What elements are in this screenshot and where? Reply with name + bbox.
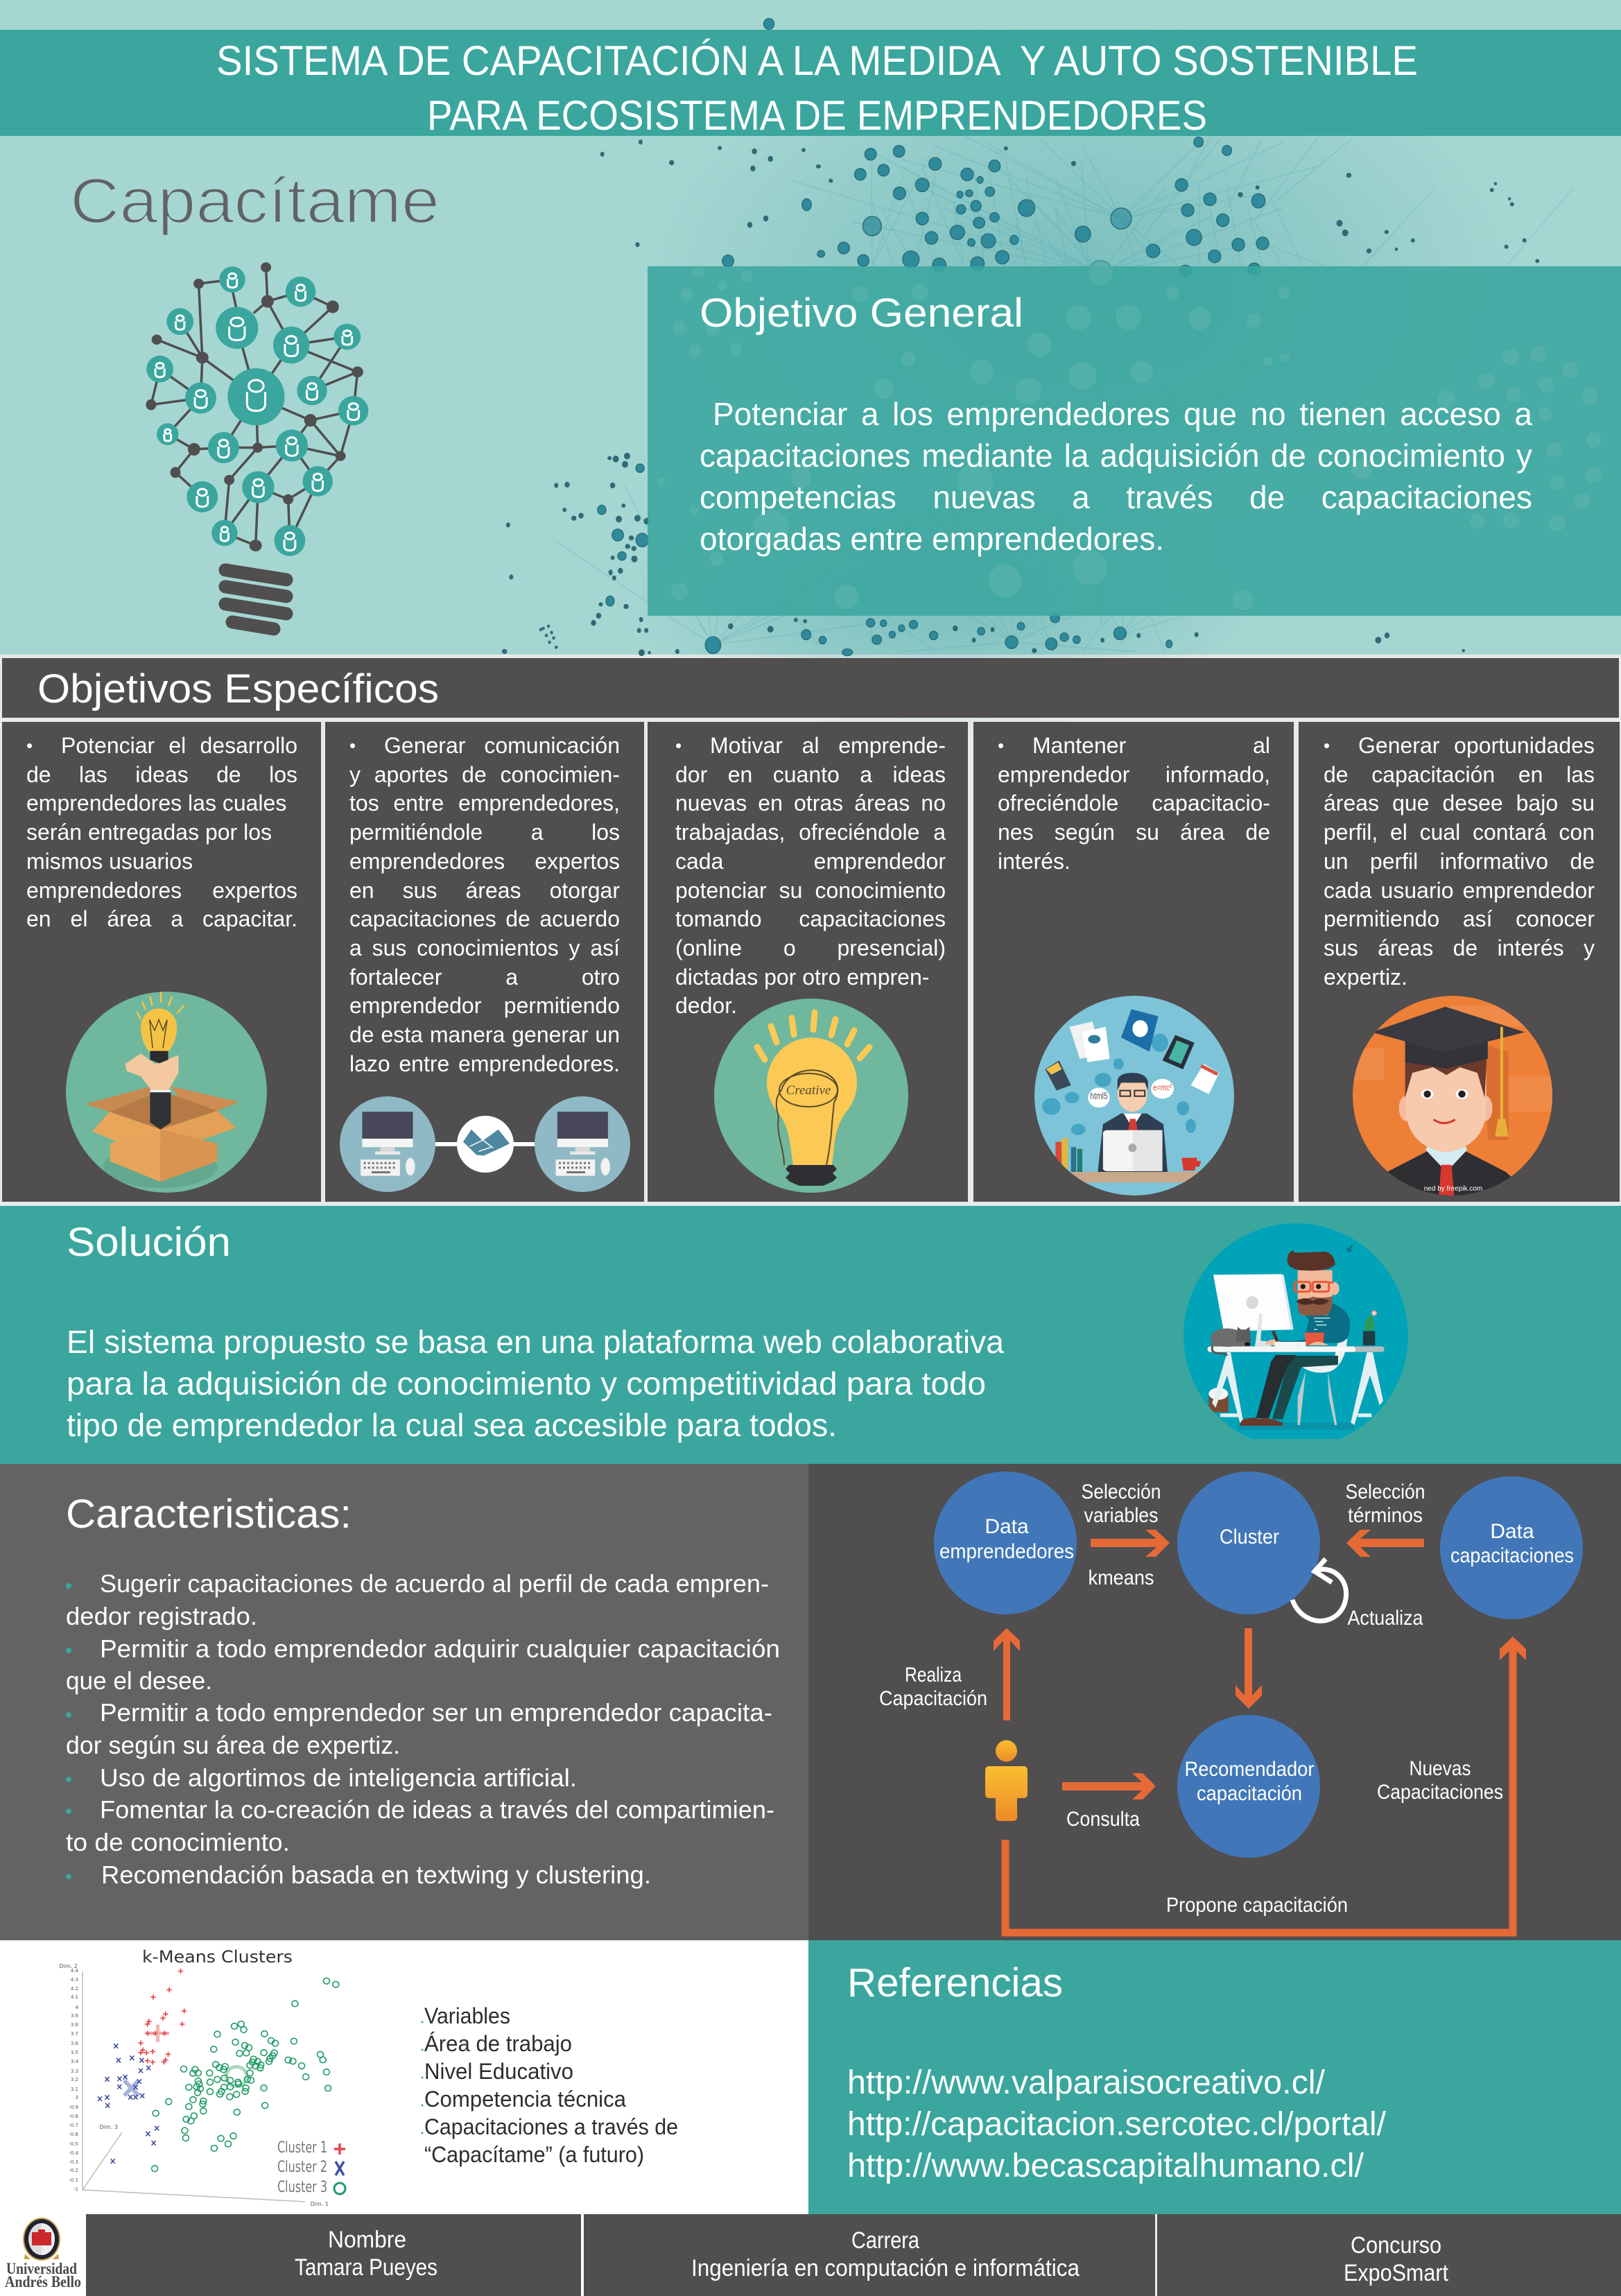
diagram labels: Capacitaciones [1377, 1781, 1503, 1804]
heading: solucion: Solución [67, 1220, 231, 1265]
diagram labels: Realiza [905, 1664, 962, 1686]
chart: k-means clusters: Dim. 1 [311, 2201, 329, 2207]
chart: k-means clusters [60, 1947, 345, 2207]
node: data capacitaciones [1440, 1476, 1583, 1619]
chart: k-means clusters: k-Means Clusters [142, 1947, 293, 1967]
column 5: permitiendo así conocer [1324, 906, 1595, 931]
chart: k-means clusters: -0.1 [69, 2177, 78, 2183]
panel: objetivo general [648, 261, 1621, 616]
diagram labels: Actualiza [1348, 1607, 1423, 1630]
column 2: emprendedores expertos [349, 849, 620, 874]
text block: caracteristicas list: to de conocimiento. [66, 1828, 290, 1856]
column 4: nes según su área de [998, 820, 1270, 845]
node: data emprendedores [934, 1471, 1077, 1614]
arrow: realiza capacitacion [994, 1628, 1020, 1720]
icon: graduate portrait [1353, 996, 1555, 1198]
text block: objetivo general: capacitaciones mediante la adquisición de conocimiento y [700, 438, 1532, 474]
column 1: de las ideas de los [26, 762, 297, 787]
footer: concurso: ExpoSmart [1344, 2260, 1448, 2286]
column 1: serán entregadas por los [26, 820, 272, 845]
diagram labels: Nuevas [1409, 1757, 1471, 1780]
text block: variables: “Capacítame” (a futuro) [424, 2142, 644, 2167]
column 4 [973, 722, 1294, 1202]
icon: two computers and handshake [340, 1096, 630, 1192]
panel: objetivos especificos [2, 658, 1620, 1202]
chart legend: Cluster 2 [277, 2159, 327, 2176]
heading: objetivo general: Objetivo General [700, 291, 1023, 336]
text block: solucion: para la adquisición de conocimiento y competitividad para todo [67, 1365, 986, 1401]
icon: man at laptop with floating documents: html5 [1090, 1090, 1108, 1101]
chart: k-means clusters: Dim. 2 [60, 1963, 78, 1969]
panel: k-means chart and variables [0, 1940, 808, 2296]
text block: caracteristicas list: Fomentar la co-creación de ideas a través del compartimien- [100, 1795, 774, 1824]
chart: k-means clusters: -0.8 [69, 2114, 78, 2119]
title band [0, 30, 1621, 139]
column 4: Mantener al [1032, 733, 1270, 758]
text block: caracteristicas list: dor según su área de expertiz. [66, 1731, 400, 1759]
chart: k-means clusters: -0.3 [69, 2159, 78, 2165]
logo: universidad andres bello [5, 2218, 81, 2290]
chart: k-means clusters: 3.1 [71, 2087, 78, 2092]
arrow: seleccion variables [1091, 1530, 1170, 1557]
heading band: objetivos especificos [2, 658, 1619, 718]
arrow: propone capacitacion [1005, 1642, 1513, 1933]
text block: solucion: tipo de emprendedor la cual sea accesible para todos. [67, 1407, 837, 1443]
column 1: Potenciar el desarrollo [61, 733, 297, 758]
text block: variables: Competencia técnica [424, 2087, 626, 2112]
title band: SISTEMA DE CAPACITACIÓN A LA MEDIDA Y AUTO SOSTENIBLE [216, 37, 1418, 84]
chart: k-means clusters: 3.2 [71, 2077, 78, 2082]
column 2: de esta manera generar un [349, 1022, 620, 1047]
chart: k-means clusters: -1 [73, 2186, 78, 2192]
text block: caracteristicas list: Uso de algortimos de inteligencia artificial. [100, 1763, 577, 1792]
chart: k-means clusters: 3.3 [71, 2069, 78, 2074]
chart: k-means clusters: -0.4 [69, 2150, 79, 2156]
panel: system flow diagram [808, 1464, 1621, 1940]
column 2: fortalecer a otro [349, 965, 620, 990]
heading: caracteristicas: Caracteristicas: [66, 1492, 352, 1537]
diagram labels: Capacitación [879, 1687, 987, 1710]
node: recomendador [1177, 1715, 1320, 1858]
panel: top hero with network background [0, 0, 1621, 735]
arrow: consulta [1062, 1773, 1156, 1799]
column 3: dor en cuanto a ideas [675, 762, 946, 787]
logo: universidad andres bello: Andrés Bello [5, 2273, 81, 2290]
chart: k-means clusters: -0.6 [69, 2132, 79, 2137]
diagram labels: Data [985, 1515, 1029, 1538]
chart legend: Cluster 1 [277, 2139, 327, 2157]
text block: solucion: El sistema propuesto se basa en una plataforma web colaborativa [67, 1324, 1004, 1360]
text block: caracteristicas list: Permitir a todo emprendedor adquirir cualquier capacitación [100, 1634, 780, 1663]
diagram labels: Selección [1345, 1481, 1425, 1503]
column 1: emprendedores las cuales [26, 791, 286, 815]
column 3: dedor. [675, 993, 737, 1018]
column 5: sus áreas de interés y [1324, 935, 1595, 960]
icon: hand with light bulb out of box [66, 992, 267, 1193]
diagram labels: Propone capacitación [1166, 1894, 1348, 1917]
chart: k-means clusters: 3 [76, 2095, 78, 2100]
chart: k-means clusters: 4.4 [71, 1968, 79, 1974]
footer: concurso [1157, 2214, 1621, 2296]
network background illustration [502, 14, 1574, 735]
footer: nombre: Nombre [328, 2227, 406, 2253]
column 3: potenciar su conocimiento [675, 878, 946, 903]
column 4: interés. [998, 849, 1070, 874]
text block: caracteristicas list [66, 1569, 780, 1889]
diagram labels: variables [1084, 1504, 1158, 1527]
diagram labels: kmeans [1089, 1566, 1154, 1589]
footer: nombre: Tamara Pueyes [295, 2254, 437, 2281]
text block: objetivo general: competencias nuevas a través de capacitaciones [700, 479, 1532, 515]
column 4: ofreciéndole capacitacio- [998, 791, 1270, 815]
diagram labels: emprendedores [939, 1540, 1074, 1563]
logo: universidad andres bello: Universidad [6, 2260, 77, 2277]
diagram labels: capacitación [1197, 1782, 1302, 1805]
text block: variables: Nivel Educativo [424, 2059, 573, 2084]
text block: variables: Área de trabajo [424, 2031, 572, 2056]
diagram labels [879, 1481, 1574, 1917]
panel: caracteristicas [0, 1464, 808, 1940]
column 1: mismos usuarios [26, 849, 193, 874]
column 3: trabajadas, ofreciéndole a [675, 820, 946, 845]
bullets [66, 1583, 71, 1879]
footer: nombre [86, 2214, 581, 2296]
column 2: capacitaciones de acuerdo [349, 906, 620, 931]
icon: graduate portrait: ned by freepik.com [1424, 1185, 1482, 1193]
column 5: cada usuario emprendedor [1324, 878, 1595, 903]
column 5: perfil, el cual contará con [1324, 820, 1595, 845]
text block: variables [422, 2003, 678, 2167]
chart: k-means clusters: 3.4 [71, 2059, 79, 2064]
column 5: Generar oportunidades [1358, 733, 1595, 758]
column 3: cada emprendedor [675, 849, 946, 874]
icon: man at laptop with floating documents [1034, 996, 1234, 1196]
column 3 [648, 722, 968, 1202]
chart: k-means clusters: 4.3 [71, 1977, 78, 1983]
column 5: expertiz. [1324, 965, 1407, 990]
icon: person [985, 1741, 1028, 1821]
text block: reference links: http://capacitacion.sercotec.cl/portal/ [847, 2106, 1387, 2143]
brand name: Capacítame [70, 166, 440, 236]
chart: k-means clusters: 3.8 [71, 2022, 78, 2028]
text block: objetivo general: otorgadas entre emprendedores. [700, 521, 1164, 557]
column 5: un perfil informativo de [1324, 849, 1595, 874]
chart: k-means clusters: 3.7 [71, 2031, 78, 2037]
chart legend: Cluster 3 [277, 2179, 327, 2196]
column 5: de capacitación en las [1324, 762, 1595, 787]
footer: concurso: Concurso [1351, 2232, 1441, 2259]
heading: referencias: Referencias [847, 1960, 1063, 2005]
chart: k-means clusters: 3.9 [71, 2013, 78, 2019]
icon: creative light bulb [714, 999, 908, 1193]
chart: k-means clusters: -0.9 [69, 2105, 78, 2110]
diagram labels: Consulta [1066, 1808, 1140, 1831]
footer: carrera: Ingeniería en computación e informática [691, 2255, 1080, 2281]
column 1: emprendedores expertos [26, 878, 297, 903]
chart legend [277, 2139, 345, 2196]
column 2: Generar comunicación [384, 733, 620, 758]
arrowhead: nuevas capacitaciones [1500, 1637, 1526, 1660]
diagram labels: capacitaciones [1450, 1544, 1574, 1567]
column 3: tomando capacitaciones [675, 906, 946, 931]
text block: caracteristicas list: dedor registrado. [66, 1602, 257, 1630]
column 3: nuevas en otras áreas no [675, 791, 946, 815]
chart: k-means clusters: Dim. 3 [100, 2124, 118, 2130]
text block: objetivo general: Potenciar a los emprendedores que no tienen acceso a [713, 396, 1532, 432]
icon: man at laptop with floating documents: e=mc² [1153, 1082, 1172, 1093]
column 3: dictadas por otro empren- [675, 965, 929, 990]
text block: objetivo general [700, 393, 1532, 567]
column 5: áreas que desee bajo su [1324, 791, 1595, 815]
text block: variables: Variables [424, 2003, 510, 2028]
column 2 [325, 722, 644, 1202]
text block: solucion [67, 1324, 1004, 1443]
text block: caracteristicas list: que el desee. [66, 1666, 212, 1695]
column 2: y aportes de conocimien- [349, 762, 620, 787]
icon: man working at desk [1184, 1223, 1408, 1449]
chart: k-means clusters: -0.5 [69, 2141, 78, 2147]
footer: carrera [584, 2214, 1155, 2296]
column 4: emprendedor informado, [998, 762, 1270, 787]
panel: referencias [808, 1940, 1621, 2214]
column 2: en sus áreas otorgar [349, 878, 620, 903]
chart: k-means clusters: 4.1 [71, 1994, 78, 2000]
text block: caracteristicas list: Permitir a todo emprendedor ser un emprendedor capacita- [100, 1698, 772, 1727]
column 2: emprendedor permitiendo [349, 993, 620, 1018]
diagram labels: Recomendador [1184, 1758, 1315, 1781]
text block: reference links: http://www.becascapitalhumano.cl/ [847, 2148, 1364, 2184]
column 5 [1299, 722, 1620, 1202]
column 3: (online o presencial) [675, 935, 946, 960]
panel: solucion [0, 1206, 1621, 1464]
text block: reference links [847, 2064, 1387, 2184]
column 1 [2, 722, 321, 1202]
text block: variables: Capacitaciones a través de [424, 2114, 678, 2139]
column 3: Motivar al emprende- [710, 733, 946, 758]
chart: k-means clusters: 3.6 [71, 2041, 79, 2046]
text block: reference links: http://www.valparaisocreativo.cl/ [847, 2064, 1326, 2101]
chart: k-means clusters: 3.5 [71, 2050, 78, 2055]
node: cluster [1177, 1471, 1320, 1614]
diagram labels: términos [1348, 1504, 1423, 1527]
column 2: tos entre emprendedores, [349, 791, 620, 815]
column 2: a sus conocimientos y así [349, 935, 620, 960]
column 1: en el área a capacitar. [26, 906, 297, 931]
title band: PARA ECOSISTEMA DE EMPRENDEDORES [427, 92, 1207, 139]
arrow: actualiza loop [1292, 1559, 1346, 1621]
arrow: cluster to recomendador [1236, 1628, 1262, 1709]
column 2: permitiéndole a los [349, 820, 620, 845]
diagram labels: Data [1490, 1520, 1534, 1543]
chart: k-means clusters: -0.7 [69, 2123, 78, 2128]
text block: caracteristicas list: Recomendación basada en textwing y clustering. [101, 1861, 651, 1889]
heading band: objetivos especificos: Objetivos Específicos [37, 666, 439, 711]
diagram labels: Cluster [1220, 1526, 1279, 1548]
icon: creative light bulb: Creative [786, 1083, 831, 1098]
chart: k-means clusters: -0.2 [69, 2168, 78, 2173]
chart: k-means clusters: 4 [76, 2005, 79, 2010]
text block: caracteristicas list: Sugerir capacitaciones de acuerdo al perfil de cada empren- [100, 1569, 769, 1598]
chart: k-means clusters: 4.2 [71, 1986, 78, 1992]
column 2: lazo entre emprendedores. [349, 1051, 620, 1076]
diagram labels: Selección [1082, 1481, 1161, 1503]
icon: light bulb made of connected people [146, 262, 368, 629]
footer: carrera: Carrera [851, 2227, 919, 2254]
arrow: seleccion terminos [1346, 1530, 1424, 1557]
